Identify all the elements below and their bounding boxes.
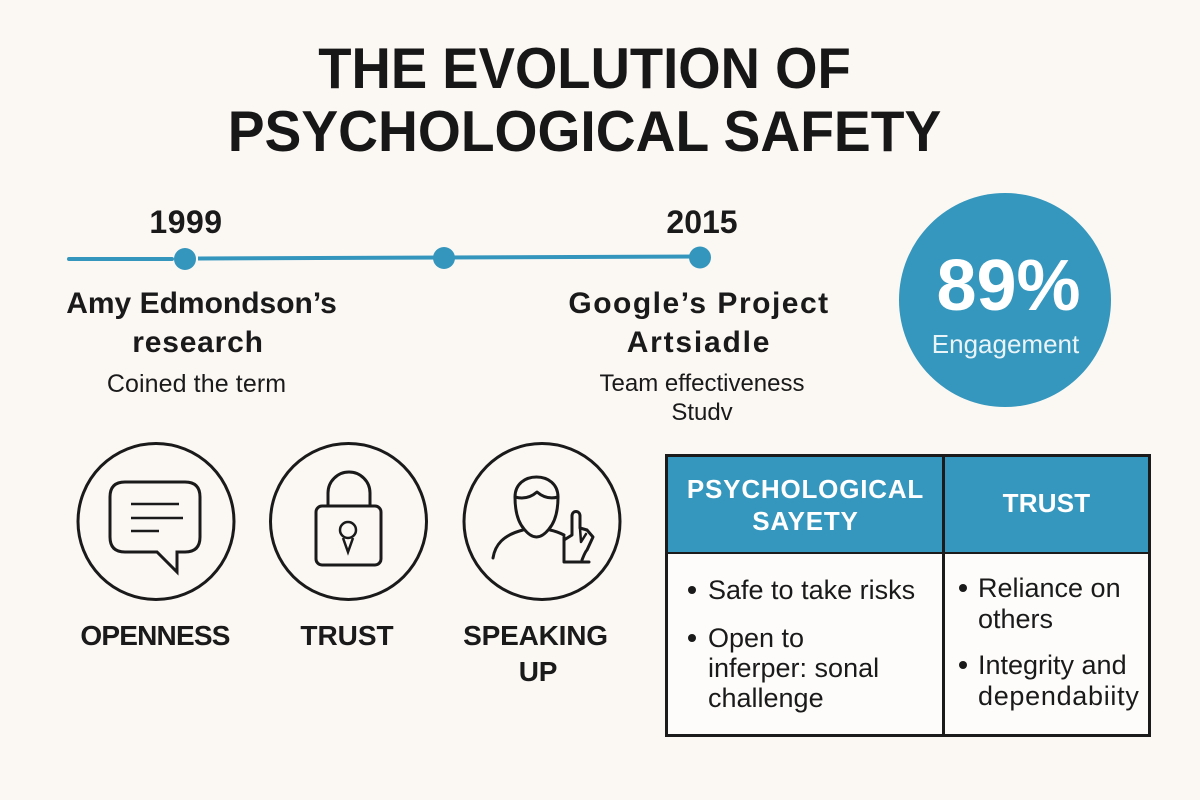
icon: speaking up person <box>462 442 622 601</box>
list: trust: dependabiity <box>978 680 1140 710</box>
icon label: trust: TRUST <box>300 620 394 651</box>
icon label: speaking up: SPEAKING <box>463 620 608 651</box>
list: psychological safety: Open to <box>708 623 804 653</box>
icon: trust lock <box>269 442 428 601</box>
icon label: openness: OPENNESS <box>80 620 230 651</box>
list: trust: Reliance on <box>978 572 1121 602</box>
list: psychological safety: inferper: sonal <box>708 653 879 683</box>
list: psychological safety: Safe to take risks <box>708 575 915 605</box>
comparison table <box>665 454 1151 737</box>
icon label: speaking up: UP <box>519 656 557 687</box>
header rule <box>668 552 1148 554</box>
year 1999: 1999 <box>149 204 223 240</box>
milestone: Google <box>568 287 830 359</box>
milestone: Google: Artsiadle <box>627 326 771 359</box>
title: PSYCHOLOGICAL SAFETY <box>228 100 941 164</box>
milestone note: team effectiveness <box>600 370 804 426</box>
icon: openness speech bubble <box>76 442 236 601</box>
title <box>228 37 941 164</box>
header: psychological safety: SAYETY <box>752 506 859 536</box>
list: trust <box>959 572 1140 710</box>
column divider <box>942 457 945 734</box>
stat value: 89% <box>936 246 1081 326</box>
list: psychological safety <box>688 575 915 713</box>
milestone: Amy Edmondson: research <box>132 326 264 359</box>
header: trust: TRUST <box>1003 488 1090 518</box>
timeline <box>67 246 711 270</box>
year 2015: 2015 <box>666 204 738 240</box>
header: psychological safety: PSYCHOLOGICAL <box>687 474 924 504</box>
milestone: Amy Edmondson <box>66 287 337 359</box>
milestone note: team effectiveness: Team effectiveness <box>600 370 804 397</box>
icon label: speaking up <box>463 620 608 687</box>
milestone: Amy Edmondson: Amy Edmondson’s <box>66 287 337 320</box>
milestone note: coined the term: Coined the term <box>107 370 286 398</box>
list: trust: others <box>978 604 1053 634</box>
header: trust <box>945 457 1148 553</box>
title: THE EVOLUTION OF <box>318 37 851 101</box>
stat label: Engagement <box>932 329 1079 359</box>
stat circle <box>899 193 1111 407</box>
list: trust: Integrity and <box>978 650 1127 680</box>
header: psychological safety <box>668 457 943 553</box>
list: psychological safety: challenge <box>708 683 824 713</box>
milestone: Google: Google’s Project <box>568 287 830 320</box>
milestone note: team effectiveness: Studv <box>671 399 733 426</box>
